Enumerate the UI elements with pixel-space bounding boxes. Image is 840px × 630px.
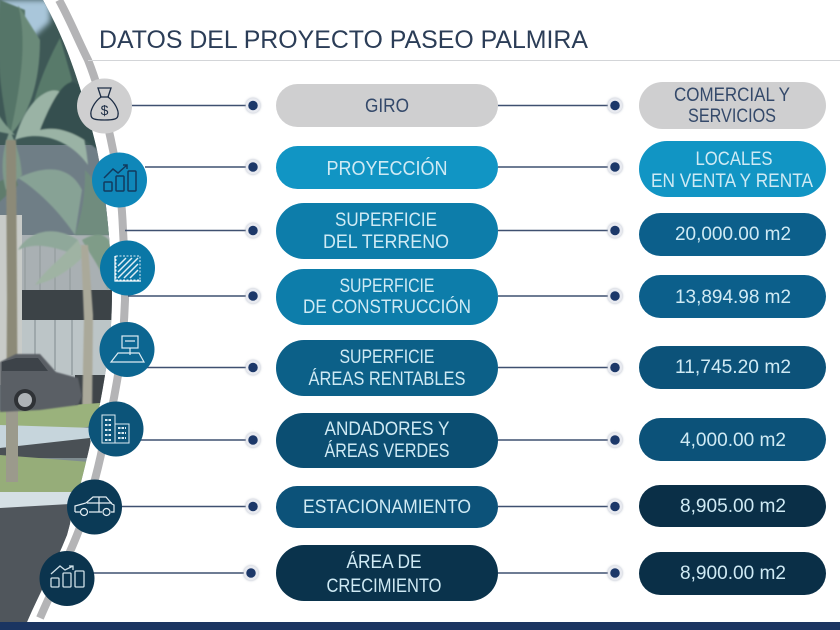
- row: superficie del terreno: 20,000.00 m2: [675, 224, 791, 245]
- row: giro: COMERCIAL Y: [674, 85, 790, 106]
- icon: car: [67, 480, 122, 534]
- trunks: [5, 139, 18, 360]
- ground bands: [0, 403, 100, 428]
- connector lines: [92, 106, 615, 573]
- row: andadores y areas verdes: ÁREAS VERDES: [324, 441, 450, 462]
- row: superficie de construccion: DE CONSTRUCCIÓN: [303, 296, 471, 318]
- connector dots: [245, 100, 621, 579]
- row: proyeccion: EN VENTA Y RENTA: [651, 171, 813, 192]
- row: superficie areas rentables: ÁREAS RENTABLES: [308, 369, 466, 390]
- row: giro: GIRO: [365, 96, 409, 117]
- row: giro: [276, 82, 826, 129]
- row: superficie del terreno: [276, 203, 826, 259]
- car: [0, 354, 82, 412]
- palm fronds: [0, 0, 115, 290]
- row: area de crecimiento: [276, 545, 826, 601]
- row: superficie de construccion: [276, 269, 826, 325]
- row: superficie de construccion: SUPERFICIE: [340, 276, 434, 297]
- icon: money bag: [77, 78, 132, 134]
- row: superficie del terreno: SUPERFICIE: [335, 210, 437, 231]
- row: giro: SERVICIOS: [688, 106, 776, 127]
- row: area de crecimiento: ÁREA DE: [346, 552, 422, 573]
- row: andadores y areas verdes: ANDADORES Y: [324, 419, 450, 440]
- row: andadores y areas verdes: 4,000.00 m2: [680, 430, 786, 451]
- icon: land area: [100, 240, 155, 296]
- decorative grey arc: [40, 0, 125, 618]
- icon: buildings: [88, 402, 144, 456]
- footer bar: [0, 622, 840, 630]
- row: superficie areas rentables: SUPERFICIE: [340, 347, 434, 368]
- row: estacionamiento: 8,905.00 m2: [680, 496, 786, 517]
- row: superficie del terreno: DEL TERRENO: [323, 232, 449, 253]
- row: proyeccion: [276, 141, 826, 197]
- icon: growth chart dark: [40, 551, 94, 606]
- photo: palms, building and car: [0, 0, 120, 630]
- row: area de crecimiento: CRECIMIENTO: [326, 576, 442, 597]
- row: andadores y areas verdes: [276, 413, 826, 468]
- title: DATOS DEL PROYECTO PASEO PALMIRA: [99, 26, 588, 54]
- icon: growth chart blue: [92, 152, 147, 208]
- row: proyeccion: PROYECCIÓN: [326, 157, 448, 180]
- row: superficie areas rentables: 11,745.20 m2: [675, 357, 791, 378]
- row: area de crecimiento: 8,900.00 m2: [680, 563, 786, 584]
- row: superficie areas rentables: [276, 340, 826, 396]
- row: superficie de construccion: 13,894.98 m2: [675, 287, 791, 308]
- row: proyeccion: LOCALES: [696, 149, 772, 170]
- row: estacionamiento: ESTACIONAMIENTO: [303, 497, 471, 518]
- row: estacionamiento: [276, 485, 826, 528]
- icon: lot with sign: [100, 322, 154, 377]
- icon: money bag: $: [101, 102, 109, 118]
